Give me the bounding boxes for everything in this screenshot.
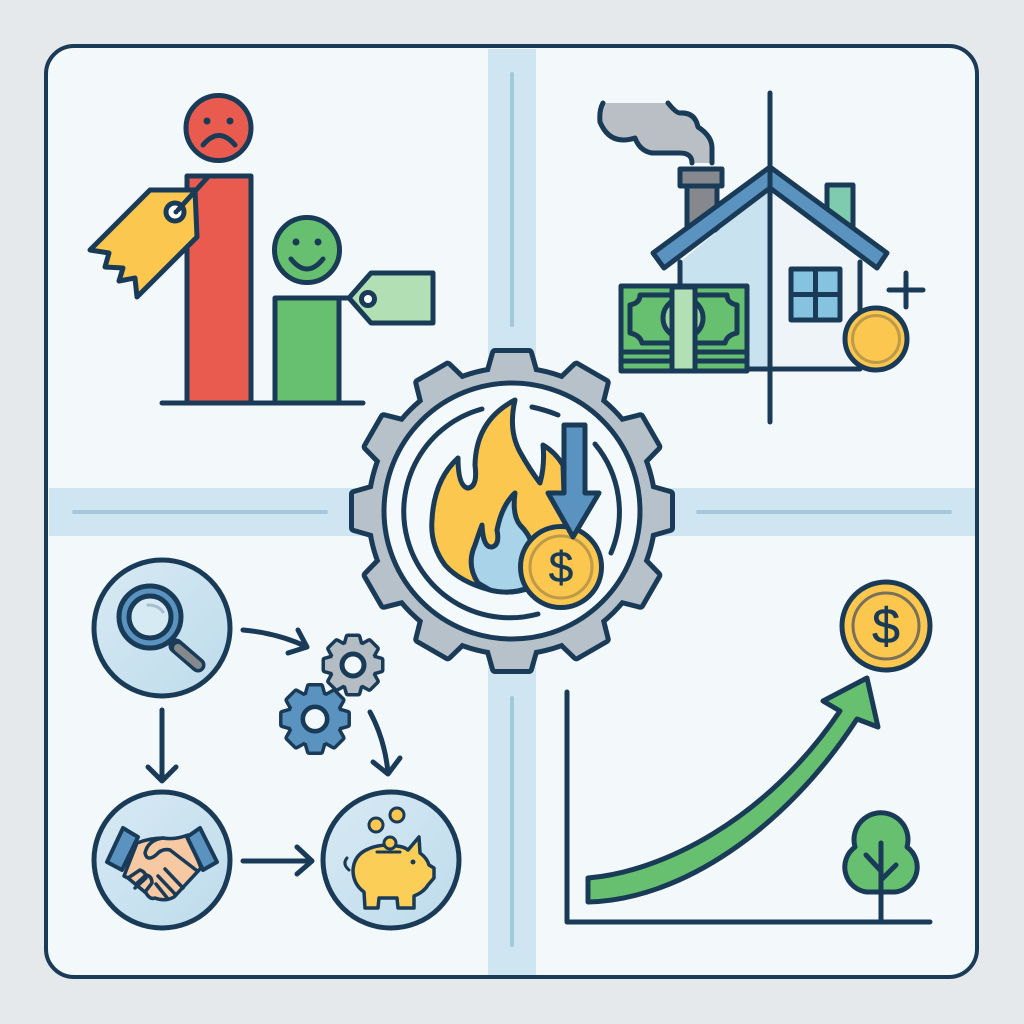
icon: roof xyxy=(653,167,887,268)
axes xyxy=(567,692,930,922)
arrow xyxy=(243,630,307,653)
icon: smoke cloud xyxy=(600,103,712,163)
icon: sad face xyxy=(186,96,251,160)
icon: green chimney xyxy=(827,185,853,229)
icon: grey gear xyxy=(325,637,381,693)
icon: down arrow xyxy=(548,425,599,537)
icon: happy face xyxy=(274,218,340,282)
icon: tree xyxy=(845,813,917,922)
green bar xyxy=(275,298,339,403)
icon: window xyxy=(791,269,840,320)
icon: cash stack xyxy=(621,286,747,371)
green growth arrow xyxy=(588,678,878,902)
icon: handshake circle xyxy=(94,792,230,928)
house walls xyxy=(680,188,860,369)
icon: gold coin xyxy=(845,308,907,370)
icon: green price tag xyxy=(339,273,433,323)
icon: blue gear xyxy=(283,687,347,751)
icon: yellow flame xyxy=(432,400,565,592)
red bar xyxy=(187,176,251,403)
panel: price comparison bars xyxy=(90,96,433,403)
icon: grey chimney xyxy=(680,169,722,230)
icon: dollar coin xyxy=(842,582,930,670)
icon: blue flame xyxy=(471,493,532,592)
panel: house with costs xyxy=(600,93,923,422)
icon: dollar coin: $ xyxy=(872,598,900,654)
arrow xyxy=(243,847,312,874)
centre divider line xyxy=(768,93,772,422)
icon: falling coin: $ xyxy=(549,543,573,592)
baseline xyxy=(162,400,363,406)
icon: magnifier circle xyxy=(94,560,230,696)
panel: growth chart xyxy=(567,582,930,922)
arrow xyxy=(370,712,400,774)
icon: piggy bank circle xyxy=(323,792,459,928)
arrow xyxy=(148,710,176,781)
panel: process flow xyxy=(94,560,459,928)
icon: falling coin xyxy=(520,526,602,608)
icon: central gear xyxy=(354,353,670,669)
icon: torn yellow price tag xyxy=(90,178,207,297)
icon: plus sign xyxy=(889,273,923,307)
